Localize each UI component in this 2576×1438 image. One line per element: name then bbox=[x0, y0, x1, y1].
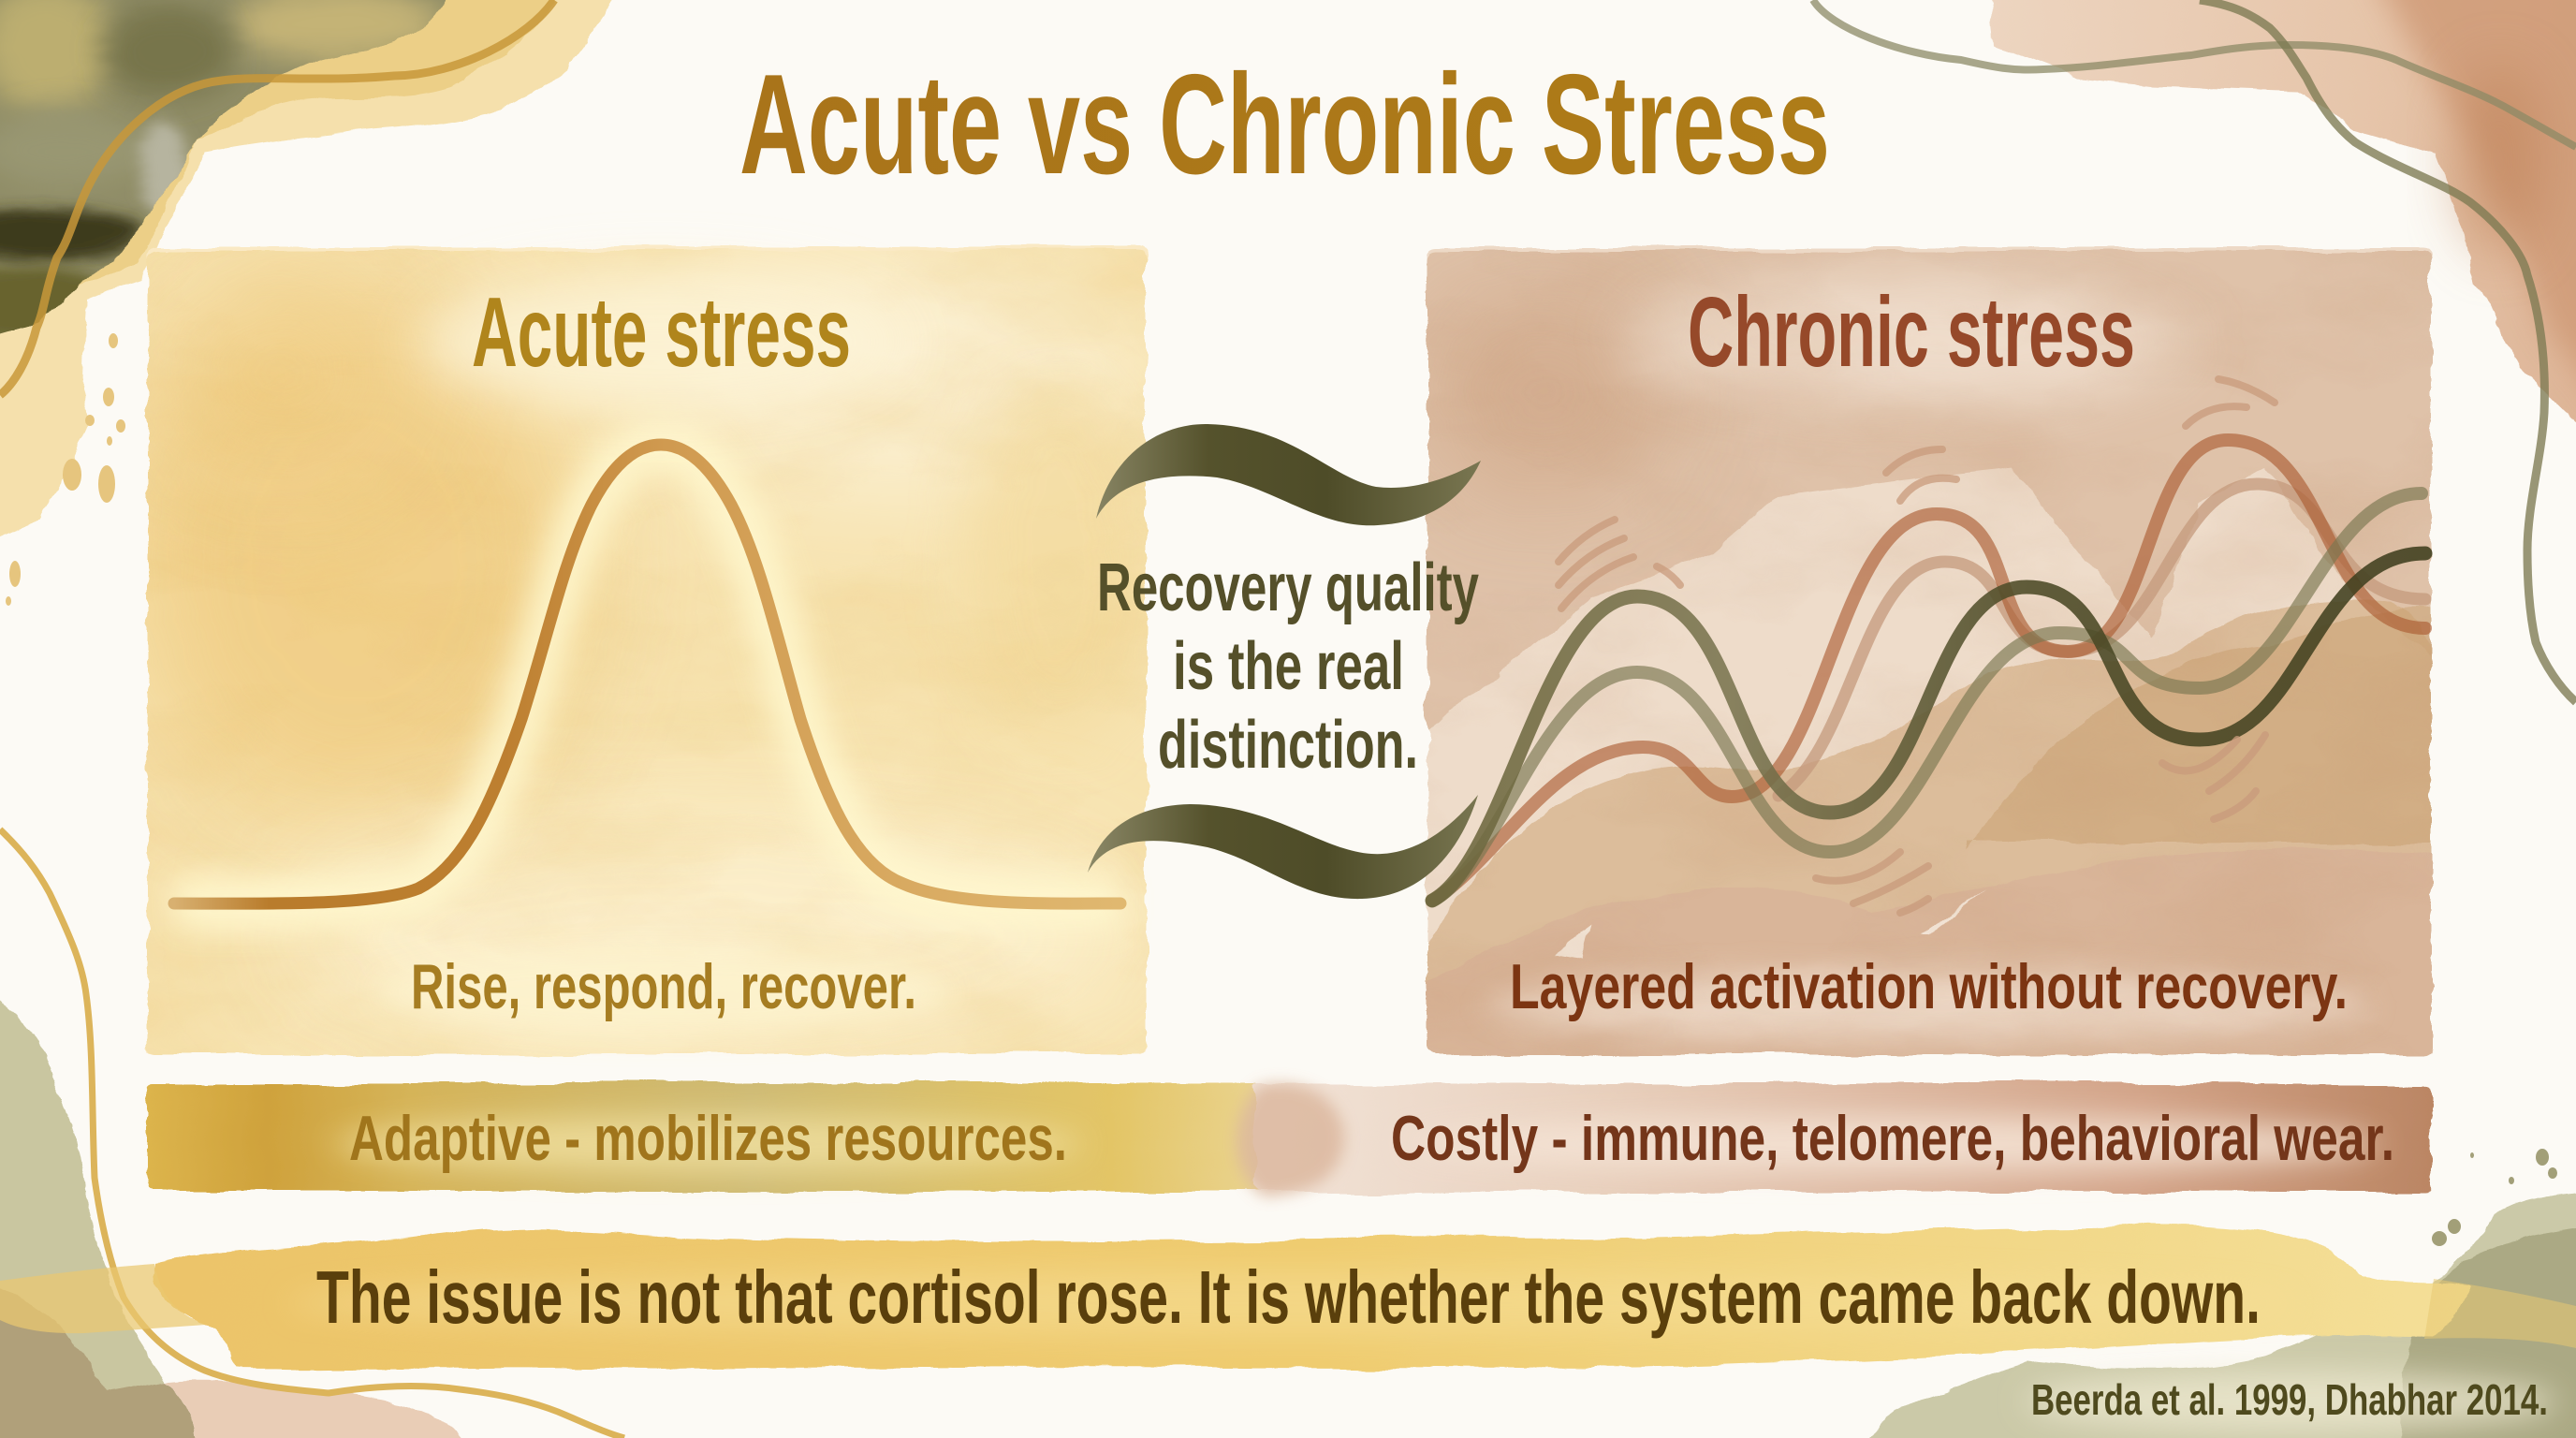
decoration: top-left watercolor wash bbox=[0, 0, 628, 552]
wave: olive light bbox=[1432, 493, 2422, 901]
band: costly bbox=[1237, 1083, 2431, 1196]
decoration: bottom-left watercolor wash bbox=[0, 829, 624, 1438]
band: key takeaway bbox=[0, 1225, 2576, 1370]
callout: recovery quality: distinction. bbox=[1158, 708, 1418, 783]
panel: acute stress bbox=[131, 247, 1151, 1058]
wave: terracotta light bbox=[1778, 484, 2425, 796]
chart: acute bell curve bbox=[174, 445, 1120, 903]
heading: acute stress bbox=[417, 271, 904, 412]
heading: acute stress: Acute stress bbox=[472, 277, 851, 388]
wave: olive dark bbox=[1432, 553, 2425, 901]
caption: chronic: Layered activation without recovery. bbox=[1510, 951, 2348, 1022]
title: Acute vs Chronic Stress bbox=[739, 45, 1830, 204]
band: adaptive bbox=[146, 1083, 1354, 1192]
panel wash: chronic bbox=[1423, 247, 2431, 1054]
caption: acute bbox=[373, 950, 953, 1034]
caption: acute: Rise, respond, recover. bbox=[411, 951, 916, 1022]
callout: recovery quality bbox=[1097, 550, 1479, 783]
decoration: top-left paint drops bbox=[6, 333, 125, 606]
panel wash: acute bbox=[131, 247, 1151, 1058]
panel: chronic stress bbox=[1423, 247, 2431, 1054]
decoration: bottom-right paint drops bbox=[2432, 1149, 2557, 1246]
wave: terracotta bbox=[1432, 440, 2425, 901]
heading: chronic stress: Chronic stress bbox=[1688, 277, 2135, 388]
bell curve glow bbox=[174, 445, 1120, 903]
arrow: top swoosh bbox=[1096, 424, 1481, 525]
chart: layered waves bbox=[1432, 440, 2425, 901]
arrow: bottom swoosh bbox=[1088, 795, 1478, 899]
decoration: top-right watercolor wash bbox=[1813, 0, 2576, 702]
callout: recovery quality: Recovery quality bbox=[1097, 550, 1479, 625]
callout: recovery quality: is the real bbox=[1173, 629, 1404, 704]
decoration: bottom-right watercolor wash bbox=[1846, 1189, 2576, 1438]
band: adaptive: Adaptive - mobilizes resources. bbox=[349, 1103, 1067, 1174]
motion arcs bbox=[1559, 379, 2275, 913]
